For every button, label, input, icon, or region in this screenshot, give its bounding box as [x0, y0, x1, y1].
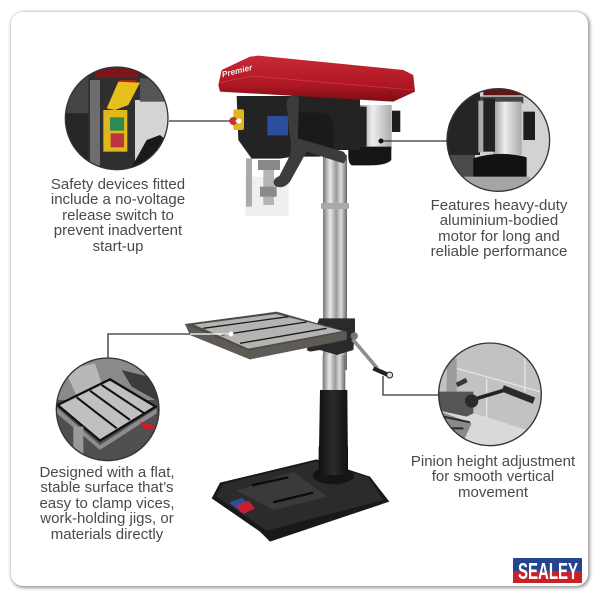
text: safety devices: release switch to — [62, 207, 174, 224]
motor — [348, 105, 400, 165]
leader line: table — [108, 332, 234, 358]
product illustration and callouts — [56, 56, 582, 583]
text: safety devices: Safety devices fitted — [51, 176, 185, 193]
chuck guard — [245, 158, 289, 216]
top red hood: Premier — [221, 62, 254, 79]
text: safety devices — [51, 176, 185, 255]
text: motor: aluminium-bodied — [440, 212, 558, 229]
text: motor: Features heavy-duty — [431, 197, 567, 214]
text: safety devices: include a no-voltage — [51, 191, 185, 208]
base badge — [229, 498, 255, 514]
leader line: pinion — [383, 376, 439, 395]
text: table: Designed with a flat, — [39, 464, 175, 481]
leader line: switch — [169, 118, 242, 124]
control label — [267, 116, 288, 135]
text: table: materials directly — [51, 526, 163, 543]
text: table — [39, 464, 175, 543]
drill press column — [321, 155, 349, 370]
text: motor — [431, 197, 568, 260]
table collar — [307, 318, 355, 355]
text: motor: motor for long and — [438, 228, 560, 245]
inset circle: safety switch — [63, 65, 170, 173]
inset circle: pinion handle — [437, 342, 543, 448]
drill head lower assembly — [218, 56, 415, 216]
text: table: easy to clamp vices, — [39, 495, 175, 512]
text: pinion: Pinion height adjustment — [411, 453, 575, 470]
crank handle — [351, 332, 393, 378]
feed handle — [274, 95, 346, 187]
leader line: motor — [378, 138, 447, 144]
safety switch — [229, 109, 244, 130]
text: table: work-holding jigs, or — [40, 510, 174, 527]
table top — [185, 312, 347, 359]
inset circle: motor — [445, 87, 552, 195]
inset circle: table — [55, 357, 162, 463]
base — [212, 447, 389, 542]
text: safety devices: start-up — [93, 238, 143, 255]
text: pinion: for smooth vertical — [432, 468, 554, 485]
top red hood — [218, 56, 415, 102]
head casing — [237, 96, 360, 159]
text: pinion — [411, 453, 576, 501]
text: table: stable surface that’s — [40, 479, 174, 496]
text: pinion: movement — [458, 484, 528, 501]
table and base — [185, 312, 393, 542]
text: motor: reliable performance — [431, 243, 567, 260]
lower column — [319, 355, 348, 470]
text: safety devices: prevent inadvertent — [54, 222, 182, 239]
